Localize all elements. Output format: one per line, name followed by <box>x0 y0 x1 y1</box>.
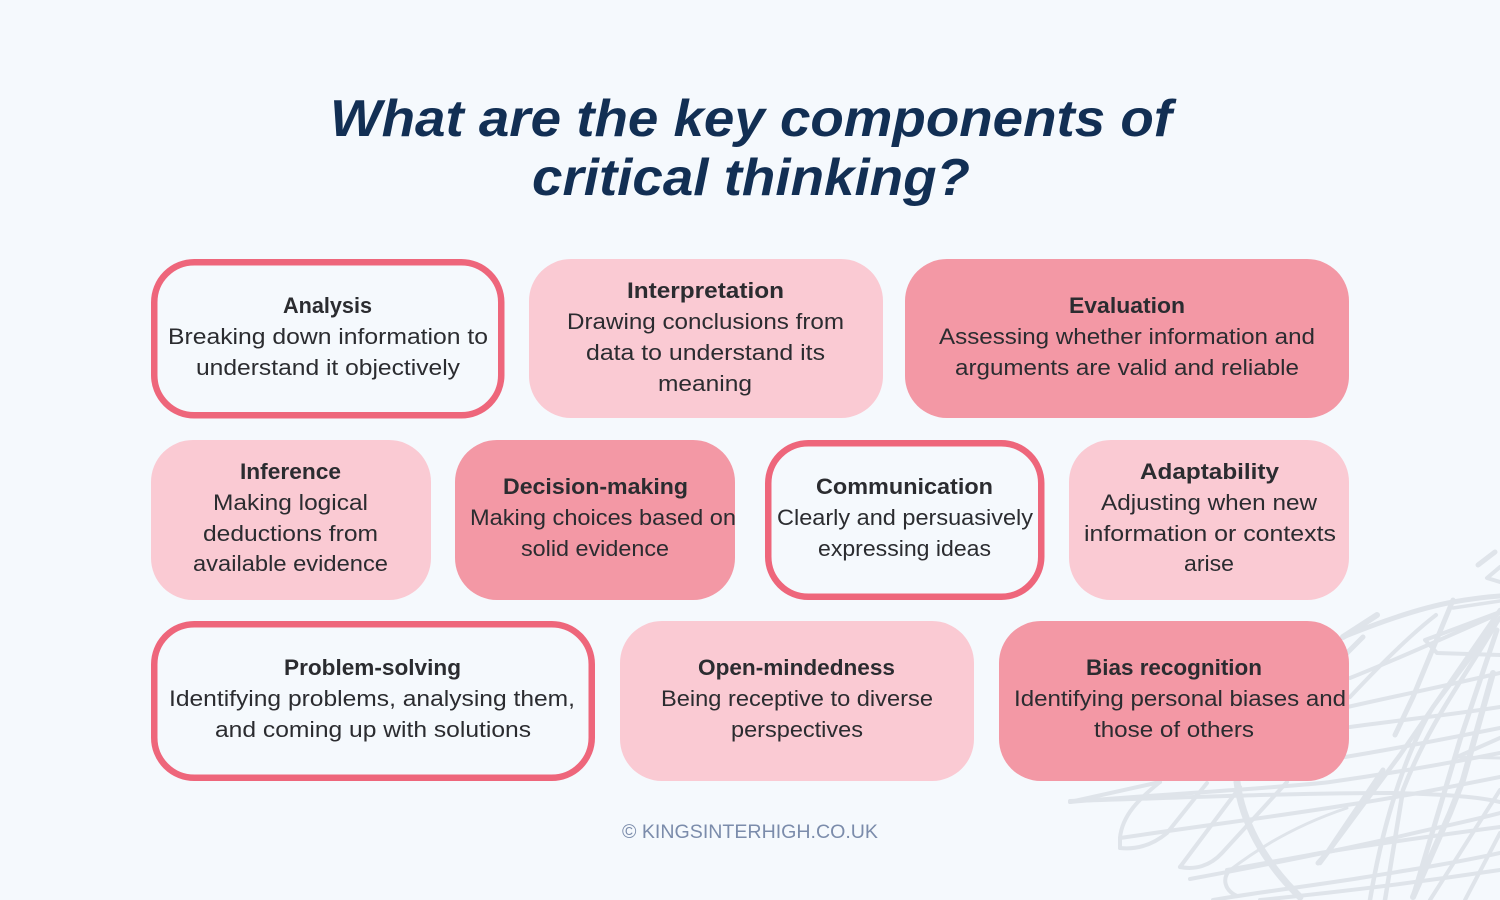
card: Decision-making: solid evidence <box>521 536 669 561</box>
card: Adaptability: Adjusting when new <box>1101 490 1318 515</box>
card: Open-mindedness <box>620 621 974 781</box>
card: Analysis: Analysis <box>283 293 372 318</box>
card: Interpretation: meaning <box>658 371 752 396</box>
card: Analysis <box>154 262 501 415</box>
card: Adaptability: arise <box>1184 551 1234 576</box>
card: Interpretation: Drawing conclusions from <box>567 309 844 334</box>
card: Open-mindedness: Open-mindedness <box>698 655 895 680</box>
card: Adaptability <box>1069 440 1349 600</box>
card: Bias recognition: those of others <box>1094 717 1254 742</box>
card: Analysis: Breaking down information to <box>168 324 488 349</box>
card: Decision-making: Making choices based on <box>470 505 736 530</box>
card: Inference: Making logical <box>213 490 368 515</box>
card: Inference <box>151 440 431 600</box>
card: Communication: Clearly and persuasively <box>777 505 1034 530</box>
card: Interpretation: data to understand its <box>586 340 825 365</box>
card: Bias recognition <box>999 621 1349 781</box>
card: Bias recognition: Bias recognition <box>1086 655 1262 680</box>
card: Inference: available evidence <box>193 551 388 576</box>
card: Problem-solving <box>154 624 592 778</box>
background scribble <box>1070 552 1500 900</box>
card: Communication <box>768 443 1041 597</box>
card: Evaluation <box>905 259 1349 418</box>
card: Problem-solving: Problem-solving <box>284 655 461 680</box>
card: Open-mindedness: Being receptive to diverse <box>661 686 933 711</box>
card: Open-mindedness: perspectives <box>731 717 863 742</box>
card: Bias recognition: Identifying personal biases and <box>1014 686 1346 711</box>
card: Communication: Communication <box>816 474 993 499</box>
card: Inference: Inference <box>240 459 341 484</box>
card: Problem-solving: Identifying problems, analysing them, <box>169 686 575 711</box>
card: Interpretation: Interpretation <box>627 278 784 303</box>
card: Problem-solving: and coming up with solutions <box>215 717 531 742</box>
card: Evaluation: Assessing whether information and <box>939 324 1315 349</box>
card: Decision-making: Decision-making <box>503 474 688 499</box>
card: Interpretation <box>529 259 883 418</box>
card: Evaluation: arguments are valid and reliable <box>955 355 1299 380</box>
card: Evaluation: Evaluation <box>1069 293 1185 318</box>
title: critical thinking? <box>532 149 970 207</box>
card: Adaptability: information or contexts <box>1084 521 1336 546</box>
card: Adaptability: Adaptability <box>1140 459 1280 484</box>
card: Communication: expressing ideas <box>818 536 991 561</box>
title <box>330 90 1177 207</box>
card: Inference: deductions from <box>203 521 378 546</box>
footer credit: © KINGSINTERHIGH.CO.UK <box>622 821 878 843</box>
title: What are the key components of <box>330 90 1177 148</box>
card: Analysis: understand it objectively <box>196 355 461 380</box>
card: Decision-making <box>455 440 736 600</box>
